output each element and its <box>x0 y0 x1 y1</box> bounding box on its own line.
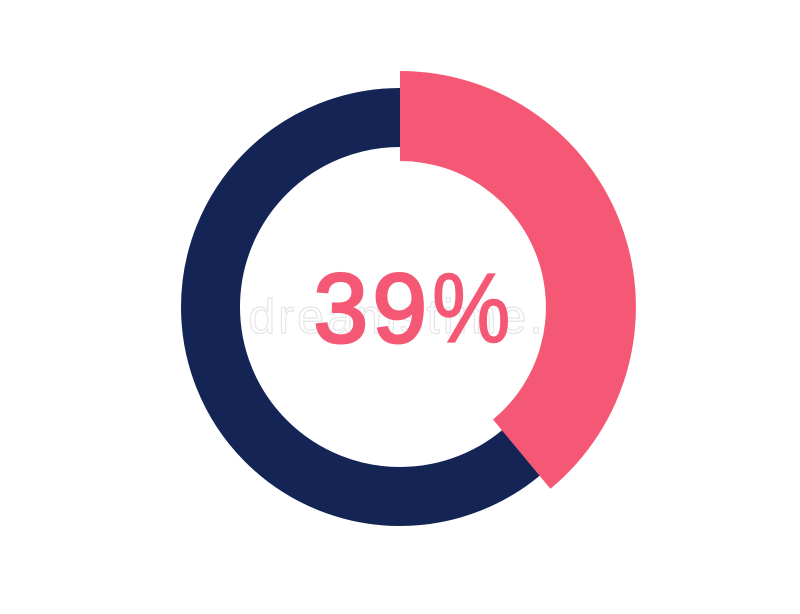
percentage label <box>314 253 510 363</box>
percentage label: 9 <box>372 253 427 363</box>
percentage label: % <box>432 254 510 363</box>
percentage label: 3 <box>314 253 368 363</box>
donut track: remaining 61% <box>210 118 590 496</box>
donut segment: 39% <box>400 71 636 489</box>
watermark: dreamstime. <box>248 291 546 344</box>
